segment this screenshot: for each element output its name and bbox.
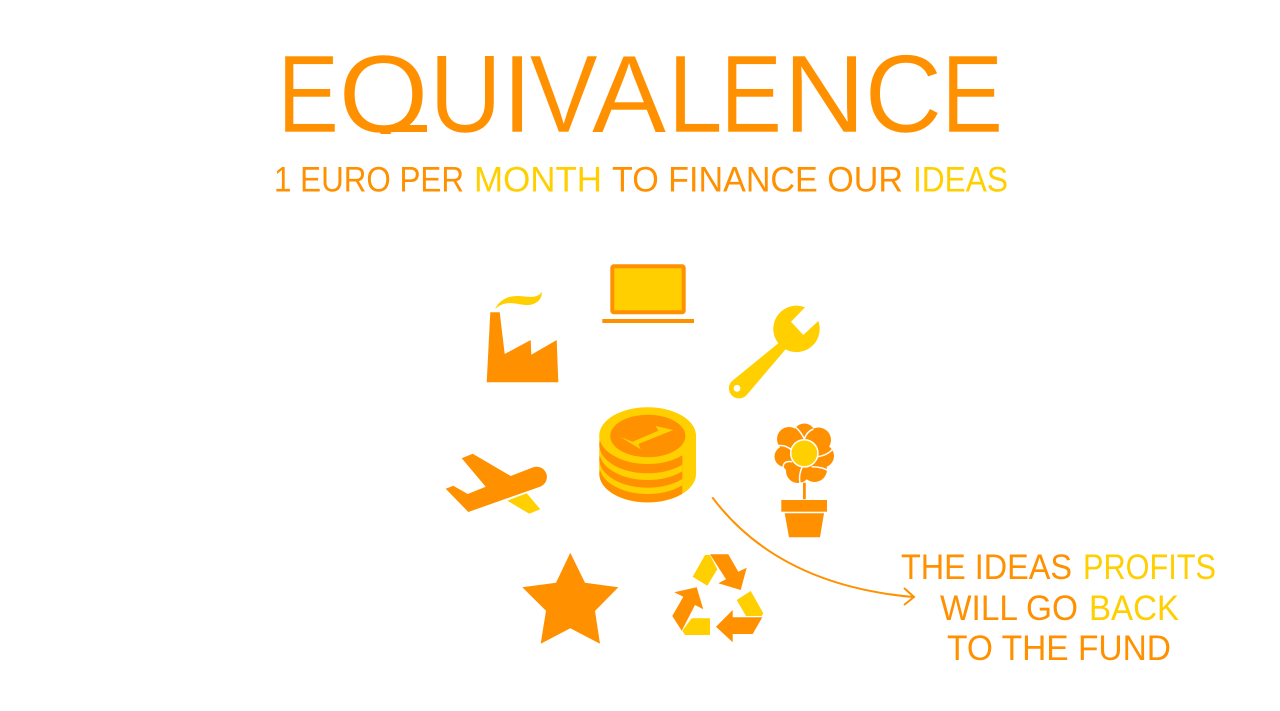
arrow [712,497,914,605]
title: L [668,33,723,156]
icon: star [522,553,618,644]
title: A [592,33,667,156]
icon: laptop [602,266,694,323]
icon: wrench [729,306,820,398]
subtitle: IDEAS [913,161,1008,200]
title: N [783,33,866,156]
subtitle [274,161,1008,200]
icon: coin stack [599,407,696,502]
title: V [530,33,598,156]
callout: TO THE FUND [947,629,1171,668]
icon: airplane [446,454,547,514]
title [284,54,999,134]
icon: recycle [672,554,763,642]
title: Q [338,33,428,156]
subtitle: 1 EURO PER [274,161,464,200]
callout: WILL GO [940,589,1078,628]
title: C [865,33,942,156]
callout [901,548,1216,668]
title: U [429,33,502,156]
callout: PROFITS [1083,548,1216,587]
callout: THE IDEAS [901,548,1072,587]
title: E [720,33,782,156]
title: I [502,33,532,156]
subtitle: MONTH [474,161,602,200]
icon: flower in pot [774,424,834,537]
callout: BACK [1089,589,1179,628]
icon: factory [487,292,558,382]
title: E [941,33,1003,156]
subtitle: TO FINANCE OUR [612,161,903,200]
title: E [277,33,339,156]
